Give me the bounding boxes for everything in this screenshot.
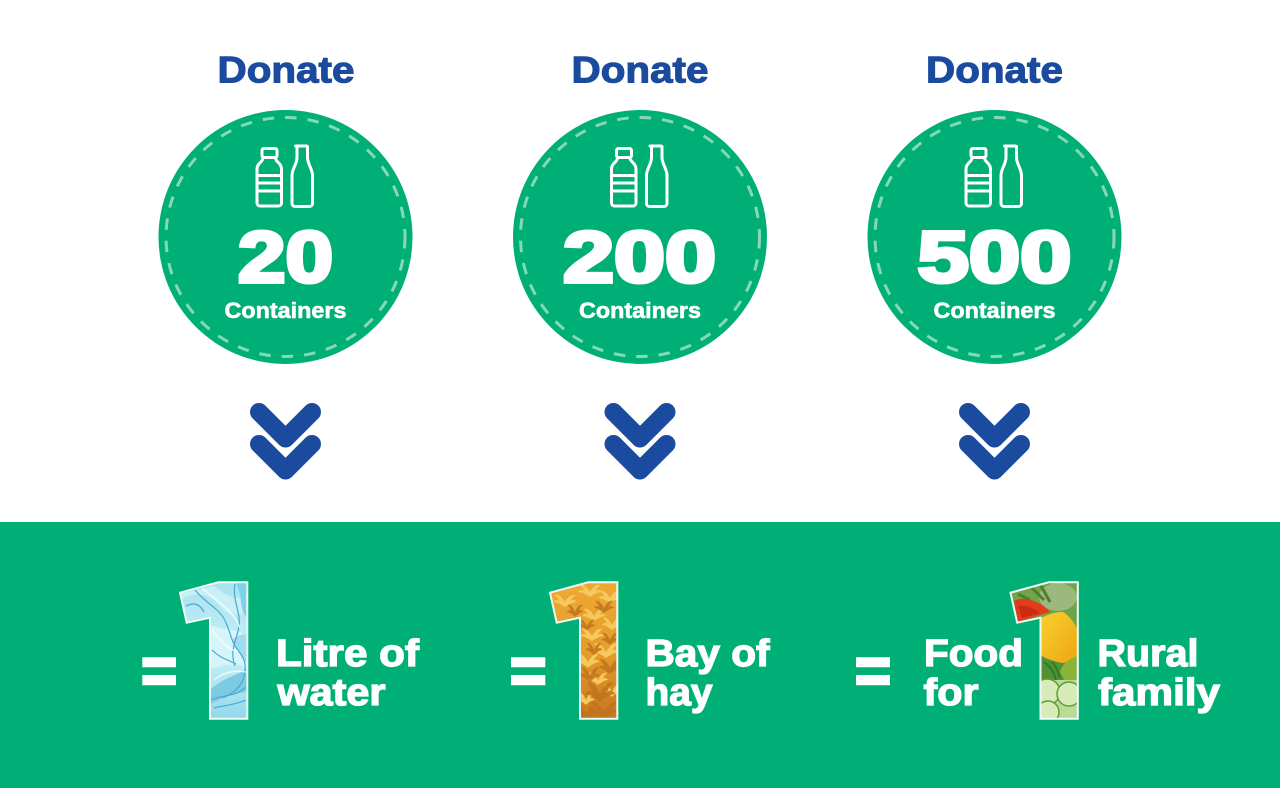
text: bay of hay [646, 633, 770, 714]
green badge [513, 110, 767, 364]
text: rural family [1098, 633, 1220, 714]
numeral 1: water texture [178, 581, 248, 720]
text: food for: Food [924, 633, 1023, 675]
icon: bottles [257, 146, 312, 206]
icon: bottles [612, 146, 667, 206]
numeral 1: vegetable texture [1009, 581, 1079, 720]
green badge [158, 110, 412, 364]
panel: donate 500 containers [868, 50, 1122, 470]
heading: donate: Donate [572, 50, 708, 90]
equals sign [142, 657, 176, 685]
text: food for: for [924, 672, 979, 714]
label: containers: Containers [934, 298, 1056, 323]
text: litre of water: water [276, 672, 386, 714]
arrow: double chevron [259, 412, 312, 470]
text: rural family: Rural [1098, 633, 1198, 675]
number 20: 20 [238, 218, 333, 298]
panel: donate 200 containers [513, 50, 767, 470]
text: food for [924, 633, 1023, 714]
equals sign [856, 657, 890, 685]
panel: donate 20 containers [158, 50, 412, 470]
dashed ring [875, 118, 1114, 356]
heading: donate: Donate [926, 50, 1063, 90]
text: litre of water [276, 633, 419, 714]
icon: bottles [966, 146, 1022, 206]
panel: 1 bay of hay [511, 578, 770, 724]
text: rural family: family [1098, 672, 1220, 714]
number 500: 500 [918, 218, 1072, 298]
label: containers: Containers [579, 298, 701, 323]
panel: food for 1 rural family [856, 578, 1220, 724]
dashed ring [520, 118, 760, 356]
heading: donate: Donate [218, 50, 354, 90]
numeral 1: hay texture [548, 581, 618, 720]
equals sign [511, 657, 545, 685]
label: containers: Containers [224, 298, 346, 323]
arrow: double chevron [614, 412, 666, 470]
arrow: double chevron [968, 412, 1021, 470]
text: bay of hay: hay [646, 672, 712, 714]
dashed ring [166, 118, 405, 356]
text: litre of water: Litre of [276, 633, 419, 675]
green badge [868, 110, 1122, 364]
panel: 1 litre of water [142, 578, 419, 724]
text: bay of hay: Bay of [646, 633, 770, 675]
number 200: 200 [563, 218, 716, 298]
background band [0, 522, 1280, 788]
